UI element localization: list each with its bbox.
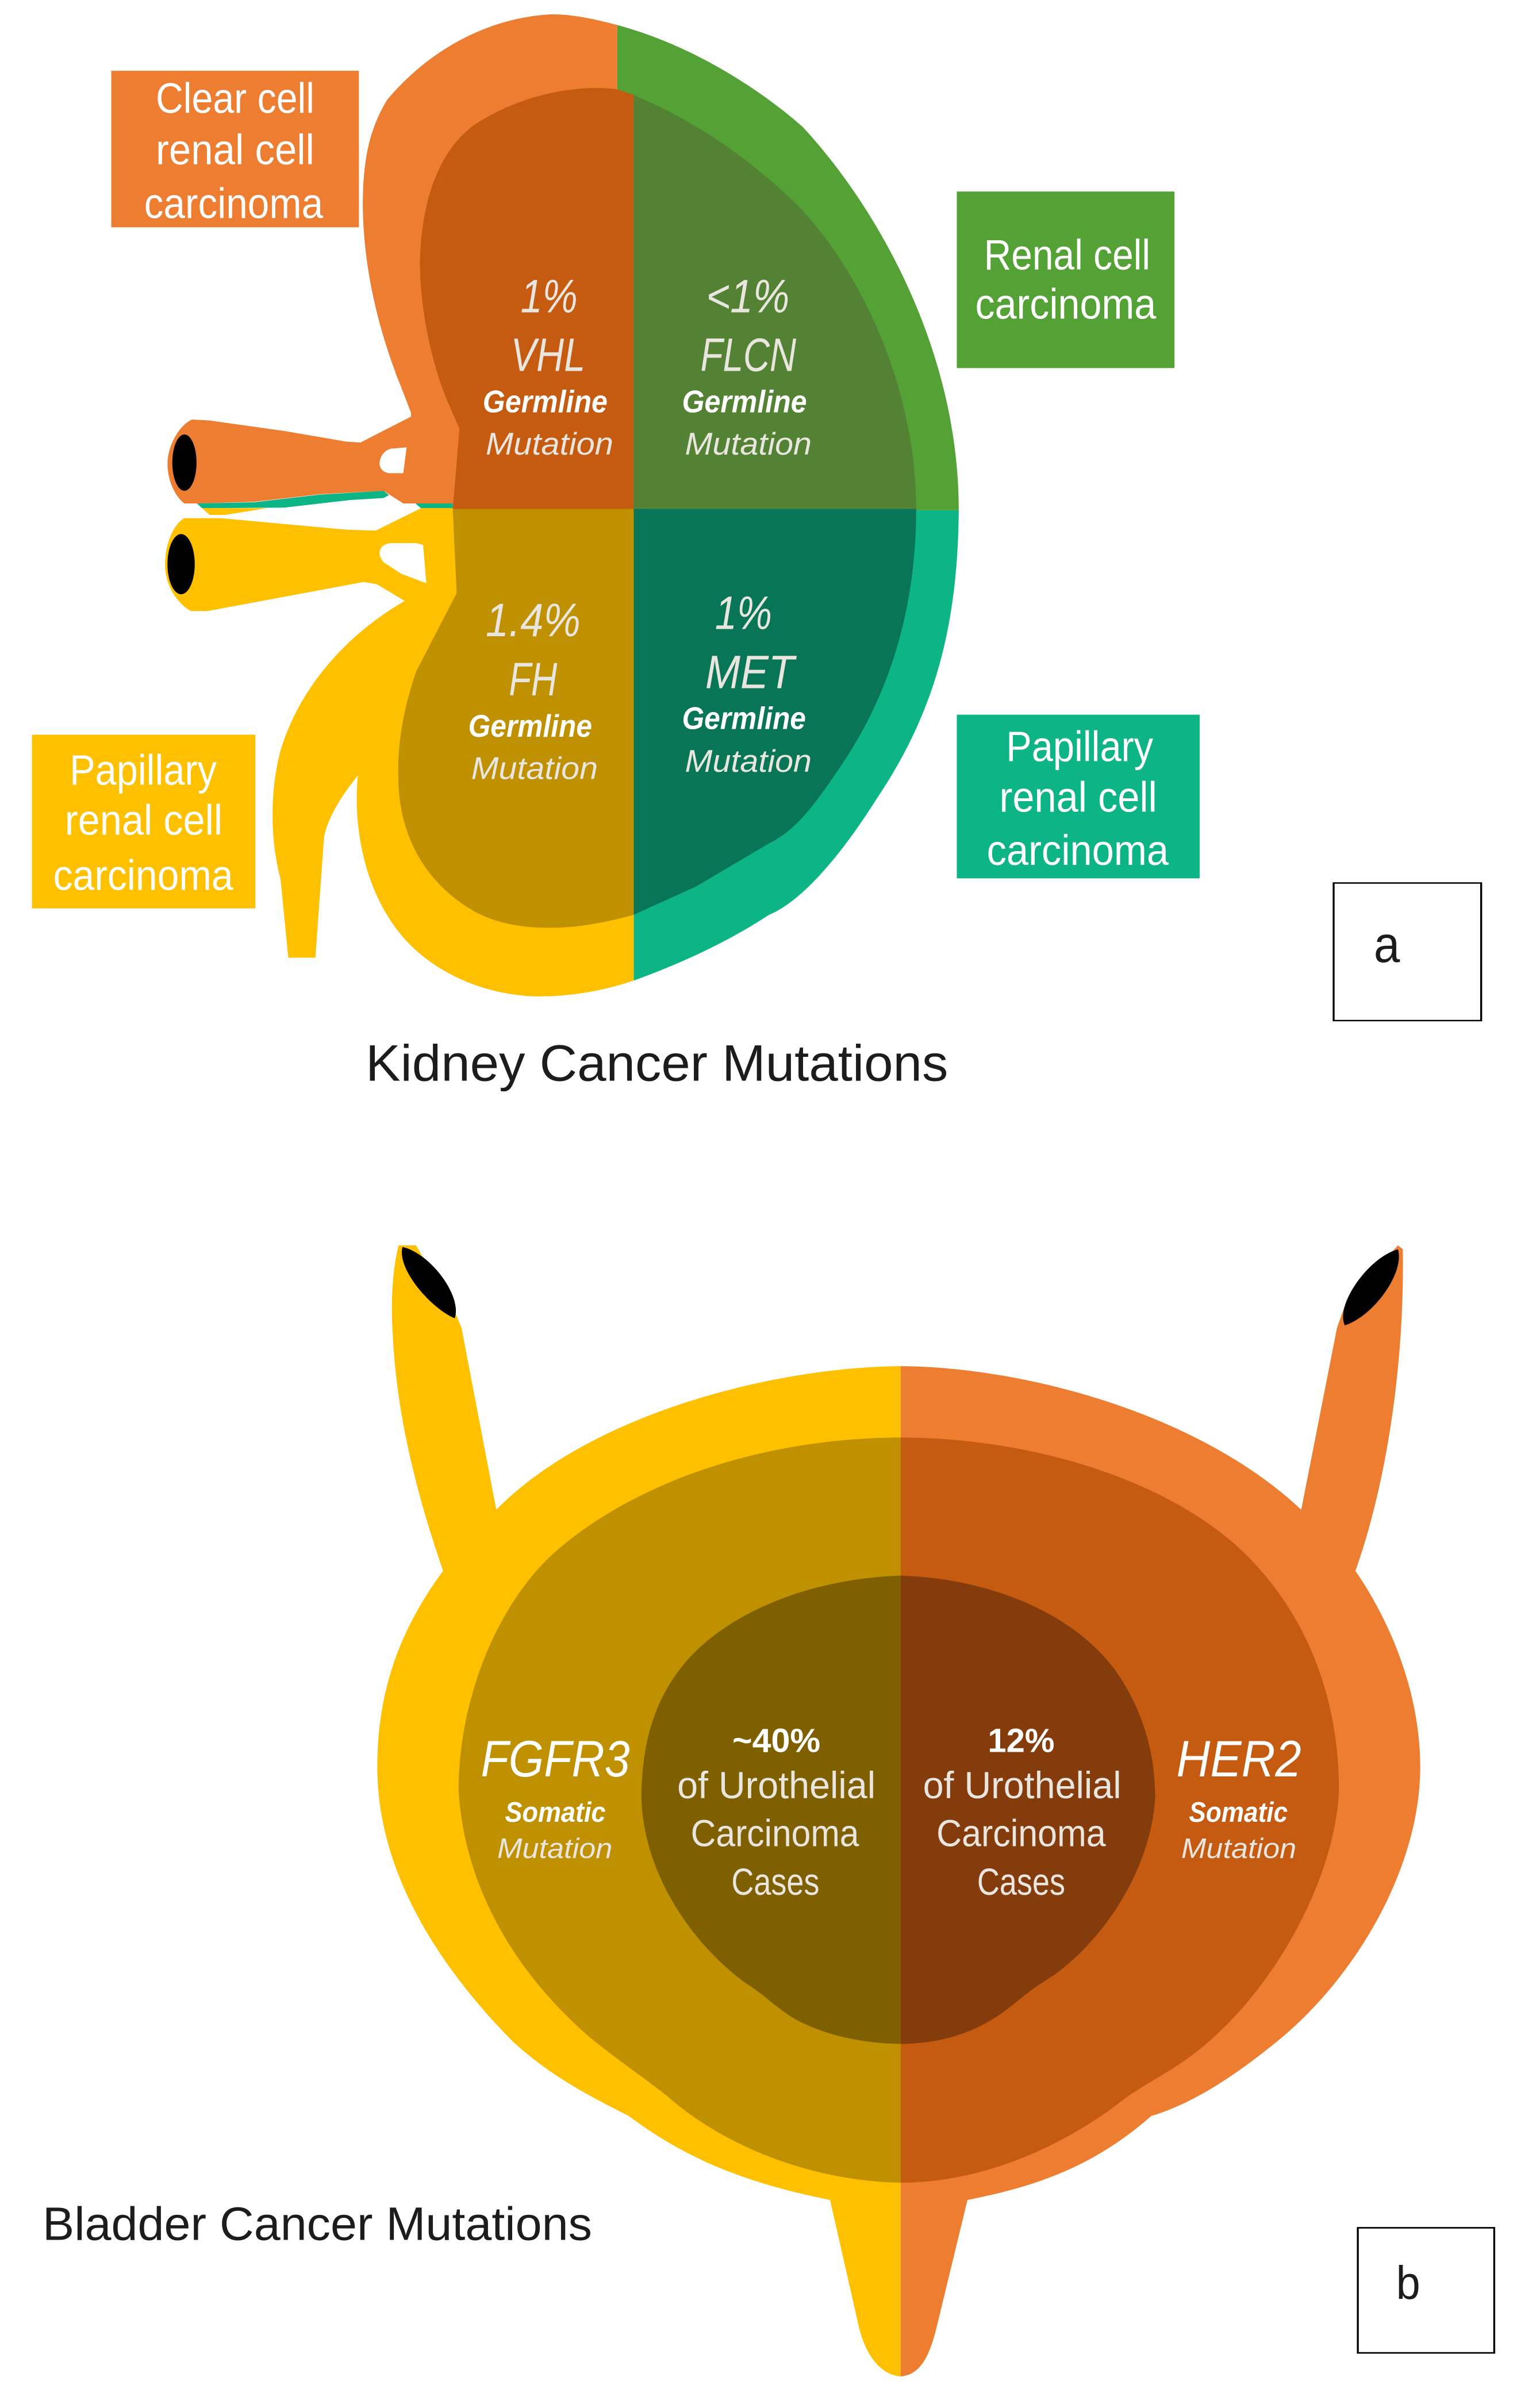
label: papillary renal cell carcinoma yellow: carcinoma [53, 851, 233, 899]
text: HER2: HER2 [1177, 1731, 1301, 1788]
quadrant: clear cell outer [363, 14, 633, 509]
quadrant: papillary outer teal [633, 510, 959, 980]
panel tag b [1358, 2228, 1494, 2353]
text: 40 percent: Carcinoma [691, 1812, 859, 1855]
quadrant: papillary outer yellow [272, 509, 633, 997]
label: renal cell carcinoma [957, 191, 1174, 368]
inner quadrant: VHL [420, 88, 633, 509]
text: 12 percent: of Urothelial [923, 1764, 1122, 1806]
vessel strip: teal [197, 491, 453, 508]
text: FGFR3: Mutation [497, 1832, 612, 1864]
label: papillary renal cell carcinoma yellow: Papillary [70, 746, 217, 794]
label: clear cell renal cell carcinoma: carcinoma [144, 179, 324, 227]
label: papillary renal cell carcinoma yellow: renal cell [65, 796, 222, 844]
hole: orange vessel [379, 447, 406, 473]
vessel: yellow [165, 508, 458, 642]
label: renal cell carcinoma: Renal cell [984, 231, 1150, 279]
ureter opening left [402, 1247, 456, 1318]
text: 12 percent: Carcinoma [936, 1812, 1106, 1855]
text: FLCN: <1% [706, 270, 789, 322]
vessel: orange [167, 374, 463, 503]
text: FGFR3: FGFR3 [481, 1731, 630, 1788]
renal vessels [165, 374, 463, 642]
vessel opening: yellow [167, 534, 195, 594]
text: FLCN: FLCN [700, 328, 796, 381]
title: kidney cancer mutations: Kidney Cancer Mutations [366, 1034, 948, 1092]
label: clear cell renal cell carcinoma: Clear cell [156, 74, 314, 122]
inner quadrant: MET [633, 509, 916, 915]
bladder outer left with ureter [377, 1245, 901, 2376]
text: VHL: Mutation [486, 426, 613, 461]
middle layer right [901, 1437, 1339, 2183]
quadrant: renal cell outer [617, 25, 959, 510]
text: FLCN: Mutation [685, 426, 812, 461]
label: papillary renal cell carcinoma teal: Papillary [1006, 722, 1154, 770]
text: MET [682, 586, 812, 779]
text: 40 percent [677, 1721, 875, 1903]
label: papillary renal cell carcinoma teal [957, 715, 1200, 878]
text: HER2 [1177, 1731, 1301, 1864]
label: papillary renal cell carcinoma teal: renal cell [1000, 773, 1157, 821]
text: FGFR3: Somatic [505, 1797, 606, 1828]
panel tag a: a [1374, 915, 1400, 973]
text: 12 percent: Cases [977, 1860, 1065, 1903]
inner quadrant: FLCN [633, 95, 916, 509]
label: papillary renal cell carcinoma teal: carcinoma [987, 826, 1169, 874]
inner layer left [642, 1576, 901, 2044]
text: 40 percent: Cases [731, 1860, 820, 1903]
text: MET: Germline [682, 701, 806, 736]
text: MET: 1% [715, 586, 772, 639]
text: MET: MET [705, 646, 797, 698]
label: papillary renal cell carcinoma yellow [32, 734, 255, 909]
text: FLCN: Germline [682, 384, 807, 419]
text: MET: Mutation [685, 744, 812, 779]
label: clear cell renal cell carcinoma [112, 71, 359, 227]
text: FLCN [682, 270, 812, 461]
text: FGFR3 [481, 1731, 630, 1864]
text: FH: FH [509, 653, 558, 706]
title: bladder cancer mutations: Bladder Cancer Mutations [43, 2198, 592, 2250]
bladder outer right with ureter [901, 1245, 1420, 2376]
text: VHL: VHL [511, 328, 585, 381]
text: FH [468, 594, 598, 786]
label: renal cell carcinoma: carcinoma [975, 280, 1157, 328]
text: FH: 1.4% [486, 594, 581, 646]
text: VHL: 1% [520, 270, 578, 322]
text: HER2: Somatic [1189, 1797, 1288, 1828]
text: FH: Germline [468, 709, 592, 744]
inner quadrant: FH [398, 509, 633, 928]
bladder diagram [43, 1245, 1494, 2376]
kidney outer quadrants [272, 14, 959, 997]
text: 12 percent: 12% [988, 1721, 1054, 1759]
kidney diagram [32, 14, 1481, 1092]
text: FH: Mutation [471, 751, 598, 786]
panel tag b: b [1396, 2257, 1420, 2309]
text: HER2: Mutation [1181, 1832, 1296, 1864]
kidney inner quadrants and labels [32, 71, 1481, 1092]
middle layer left [459, 1437, 901, 2183]
vessel opening: orange [172, 434, 197, 491]
ureter opening right [1343, 1249, 1399, 1325]
text: 12 percent [923, 1721, 1122, 1903]
hole: yellow vessel [379, 543, 427, 583]
inner layer right [901, 1576, 1155, 2044]
text: VHL: Germline [483, 384, 608, 419]
text: 40 percent: of Urothelial [677, 1764, 875, 1806]
vessel strip: yellow [202, 508, 267, 515]
text: 40 percent: ~40% [732, 1721, 820, 1759]
label: clear cell renal cell carcinoma: renal cell [156, 126, 314, 174]
text: VHL [483, 270, 613, 461]
panel tag a [1334, 883, 1481, 1021]
